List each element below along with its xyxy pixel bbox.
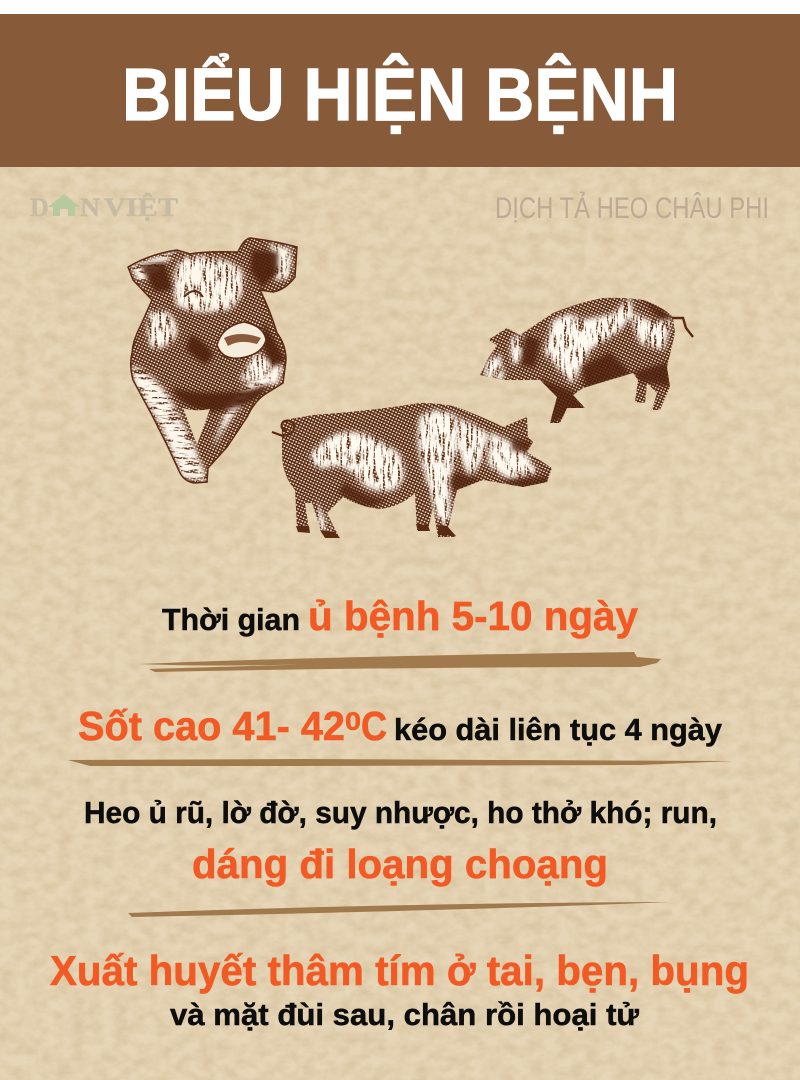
illustration: pig head with crossed legs [127,237,298,484]
icon: green house [48,194,80,216]
small pig highlights [484,298,672,384]
symptom 4: hemorrhage [50,947,749,1032]
body highlights [310,410,538,532]
body shadows [338,438,550,508]
gap between legs [183,408,210,445]
small pig tail [672,318,693,337]
symptom 1: incubation: Thời gian [162,602,300,637]
logo: Dan Viet: D [30,193,49,222]
symptom 2: fever: kéo dài liên tục 4 ngày [394,712,723,747]
illustration: small walking pig [475,295,697,427]
illustration: large standing pig [272,403,552,538]
logo: Dan Viet: N [80,193,100,222]
pig eye [184,291,203,297]
symptom 2: fever [78,703,723,749]
logo: Dan Viet [30,193,178,222]
symptom 4: hemorrhage: Xuất huyết thâm tím ở tai, bẹn, bụng [50,947,749,994]
symptom 3: lethargy: Heo ủ rũ, lờ đờ, suy nhược, ho thở khó; run, [84,795,717,830]
brush stroke divider 2 [68,759,733,766]
head highlights [147,242,292,385]
symptom 2: fever: C [361,703,387,749]
symptom 4: hemorrhage: và mặt đùi sau, chân rồi hoại tử [170,997,640,1032]
big pig tail [272,421,294,436]
logo: Dan Viet: VIỆT [104,193,178,222]
symptom 3: lethargy: dáng đi loạng choạng [192,841,608,887]
symptom 3: lethargy [84,795,717,887]
title: BIỂU HIỆN BỆNH [122,53,678,136]
head outline [128,238,297,483]
symptom 1: incubation [162,593,638,639]
symptom 2: fever: 0 [345,708,361,736]
head shadows [140,250,286,412]
brush stroke divider 3 [128,902,670,917]
snout shadow [224,334,261,346]
big pig hooves [296,524,456,538]
pig snout [217,322,266,358]
small pig shadows [520,297,676,425]
title banner [0,14,800,167]
symptom 1: incubation: ủ bệnh 5-10 ngày [308,593,638,639]
brush stroke divider 1 [139,652,661,672]
symptom 2: fever: Sốt cao 41- 42 [78,703,345,749]
